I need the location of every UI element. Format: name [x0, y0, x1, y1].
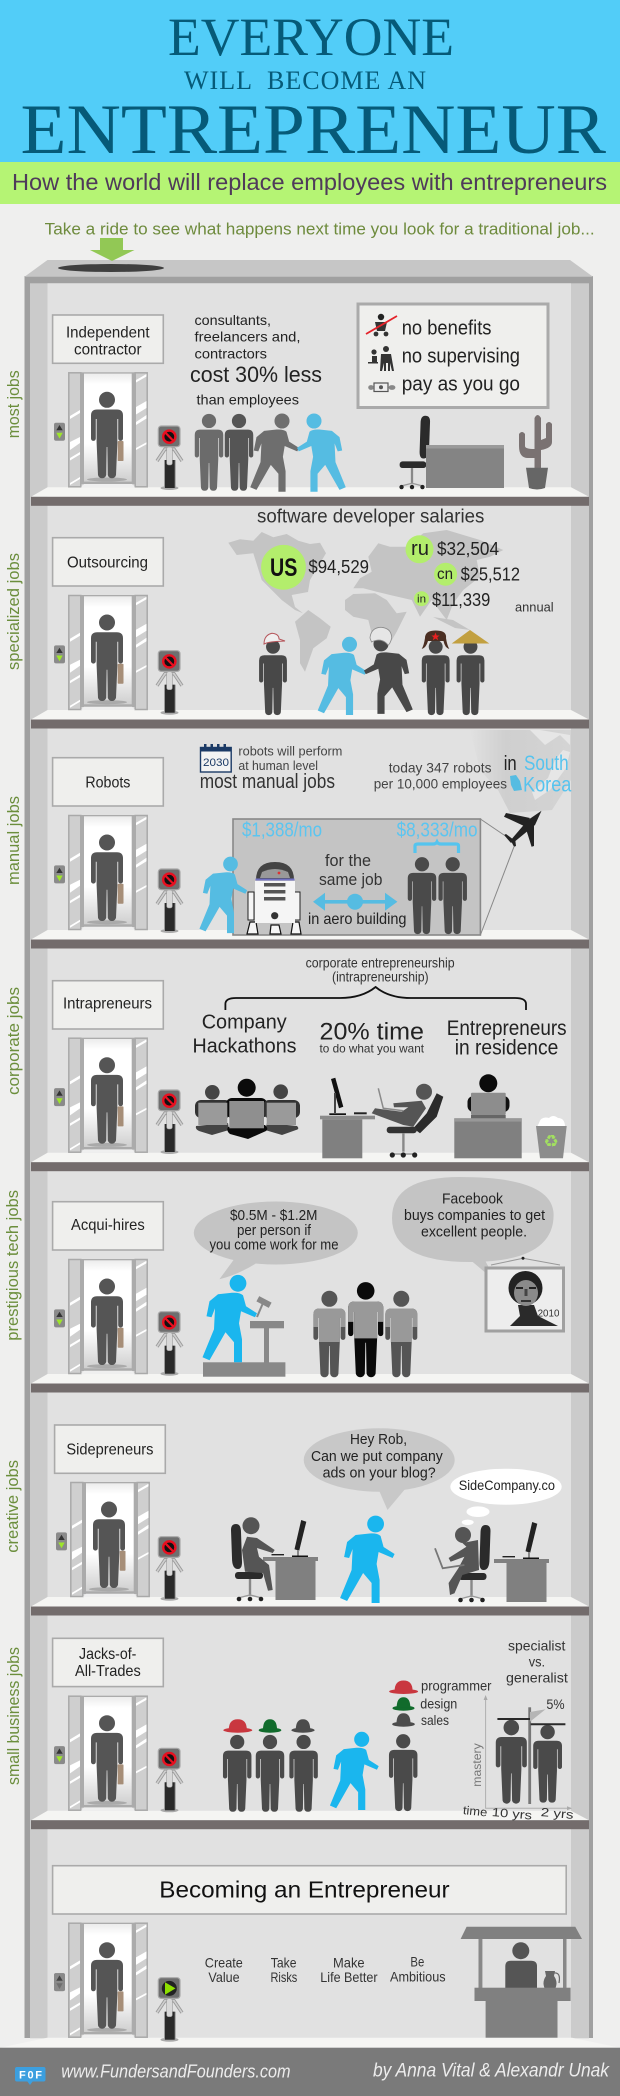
salary: US: US	[270, 554, 297, 582]
sign: independent contractor: contractor	[74, 342, 142, 359]
cactus	[519, 415, 552, 490]
double arrow	[313, 893, 397, 911]
human price: $8,333/mo	[397, 820, 478, 842]
elevator	[54, 1259, 147, 1374]
header background	[0, 0, 620, 162]
relaxing worker at desk	[320, 1078, 443, 1158]
subtitle: How the world will replace employees with entrepreneurs	[12, 169, 607, 195]
heading sign	[53, 1866, 566, 1914]
footer url: www.FundersandFounders.com	[61, 2061, 291, 2081]
kiosk: no entry	[157, 1090, 182, 1154]
blue generalist	[330, 1732, 379, 1810]
employees and contractor	[195, 413, 346, 492]
salaries heading: software developer salaries	[257, 507, 484, 528]
man with ushanka	[422, 630, 450, 715]
brace	[415, 842, 458, 853]
sign: acqui-hires	[53, 1202, 163, 1250]
hackathon group	[195, 1079, 300, 1139]
acquired team	[313, 1282, 417, 1377]
floor slabs	[31, 487, 589, 1829]
be ambitious: Be	[410, 1954, 424, 1970]
sign: outsourcing: Outsourcing	[67, 555, 148, 572]
create value: Create	[205, 1954, 243, 1970]
man with conical hat	[452, 630, 489, 715]
same job text: same job	[319, 870, 382, 889]
kiosk: no entry	[157, 869, 182, 933]
salary: China: cn	[437, 566, 453, 583]
sign: robots: Robots	[85, 775, 130, 792]
sign: intrapreneurs: Intrapreneurs	[63, 995, 152, 1012]
three specialists with hats	[223, 1719, 318, 1812]
hat legend	[389, 1678, 492, 1728]
panel: becoming an entrepreneur floor	[53, 1866, 582, 2042]
footer logo	[15, 2067, 46, 2085]
footer bar	[0, 2048, 620, 2096]
elevator	[54, 595, 147, 710]
panel: jacks-of-all-trades floor	[53, 1638, 574, 1823]
side labels: corporate jobs	[4, 987, 23, 1095]
sign: intrapreneurs	[53, 981, 163, 1029]
kiosk: no entry	[157, 1748, 182, 1812]
heading sign: Becoming an Entrepreneur	[159, 1877, 450, 1903]
entrepreneur in residence	[454, 1074, 522, 1158]
blue ad seeker	[340, 1516, 395, 1603]
desk and chair	[399, 416, 504, 489]
intro line: Take a ride to see what happens next time you look for a traditional job...	[45, 220, 595, 239]
man with legend	[389, 1734, 417, 1811]
robot price: $1,388/mo	[242, 820, 322, 842]
South Korea robots text: today 347 robots	[389, 760, 492, 776]
cost text: consultants,	[194, 312, 271, 328]
sign: sidepreneurs: Sidepreneurs	[66, 1441, 153, 1458]
sign: independent contractor	[53, 315, 163, 363]
mastery chart: 10 yrs	[491, 1805, 533, 1823]
speech bubble: Facebook: buys companies to get	[404, 1207, 546, 1224]
make life better: Life Better	[320, 1969, 378, 1985]
mastery chart: 5%	[546, 1696, 565, 1712]
panel: independent contractor floor	[53, 304, 552, 492]
side labels: small business jobs	[4, 1647, 23, 1785]
sign: robots	[53, 758, 163, 806]
recycle bin: ♻	[544, 1132, 559, 1151]
make life better	[320, 1954, 378, 1985]
panel: sidepreneurs floor	[55, 1425, 562, 1603]
man with cap	[259, 633, 287, 715]
speech bubble: Facebook	[392, 1177, 554, 1290]
side labels: prestigious tech jobs	[3, 1190, 22, 1341]
portrait	[508, 1271, 558, 1326]
South Korea robots text: South	[524, 752, 569, 775]
sign: sidepreneurs	[55, 1425, 165, 1473]
speech bubble: price: you come work for me	[210, 1236, 338, 1253]
panel: drawbacks: no benefits	[402, 317, 492, 339]
20 percent time	[320, 1018, 425, 1055]
side labels: creative jobs	[3, 1460, 22, 1553]
side labels: specialized jobs	[4, 553, 23, 670]
picture frame: 2010	[538, 1309, 560, 1320]
hat legend: design	[420, 1695, 457, 1711]
same job text: in aero building	[308, 911, 406, 928]
same job text: for the	[325, 851, 371, 870]
hat legend: sales	[421, 1712, 449, 1728]
map: Korea and Japan	[470, 730, 571, 813]
cost text: than employees	[196, 392, 299, 408]
panel: drawbacks	[358, 304, 548, 408]
panel: robots floor	[53, 730, 572, 935]
kiosk: no entry	[157, 651, 182, 715]
kiosk: no entry	[157, 426, 182, 490]
20 percent time: to do what you want	[320, 1041, 425, 1055]
take risks	[270, 1954, 297, 1985]
South Korea robots text: in	[504, 753, 517, 775]
same job text	[308, 851, 406, 928]
gavel	[256, 1296, 272, 1317]
panel: intrapreneurs floor	[53, 954, 567, 1158]
ground floor	[0, 2038, 620, 2048]
hat legend: programmer	[421, 1678, 492, 1694]
take risks: Risks	[270, 1969, 297, 1985]
entrepreneurs in residence	[447, 1017, 567, 1059]
elevator	[54, 1038, 147, 1153]
salary: Russia: ru	[411, 538, 429, 560]
speech bubble: ads: Hey Rob,	[350, 1431, 407, 1448]
make life better: Make	[333, 1954, 365, 1970]
salary: India: $11,339	[432, 590, 490, 610]
thought bubble	[450, 1469, 562, 1525]
specialist vs generalist heading: generalist	[506, 1670, 568, 1686]
salary: Russia	[406, 535, 499, 563]
zoom callout	[233, 819, 514, 935]
blue bidder	[202, 1275, 257, 1362]
title	[20, 7, 607, 169]
thought bubble: SideCompany.co	[459, 1477, 555, 1493]
cost text: contractors	[194, 345, 267, 361]
podium and platform	[203, 1321, 285, 1377]
mastery chart: time	[462, 1803, 488, 1820]
sign: jacks of all trades: Jacks-of-	[79, 1646, 136, 1663]
kiosk: no entry	[157, 1537, 182, 1601]
sign: independent contractor: Independent	[66, 324, 150, 341]
picture frame	[486, 1257, 564, 1331]
sign: outsourcing	[53, 538, 163, 586]
icon: calendar 2030	[200, 744, 231, 772]
salary: Russia: $32,504	[437, 539, 499, 559]
kiosk: no entry	[157, 1312, 182, 1376]
speech bubble: Facebook: excellent people.	[421, 1224, 527, 1241]
corporate heading	[306, 954, 455, 985]
side labels: manual jobs	[4, 796, 23, 885]
building shell	[24, 260, 593, 2038]
speech bubble: price: $0.5M - $1.2M	[230, 1207, 318, 1224]
subtitle band	[0, 162, 620, 204]
panel: outsourcing floor	[53, 507, 554, 715]
side labels	[3, 370, 23, 1785]
recycle bin	[536, 1116, 567, 1158]
speech bubble: Facebook: Facebook	[442, 1190, 503, 1207]
company hackathons: Company	[202, 1011, 287, 1033]
20 percent time: 20% time	[320, 1018, 424, 1045]
blogger at laptop	[435, 1522, 549, 1602]
company hackathons	[192, 1011, 296, 1057]
handshake	[318, 627, 413, 715]
salary: US: $94,529	[308, 557, 369, 577]
icon: calendar 2030: 2030	[203, 757, 229, 769]
corporate heading: corporate entrepreneurship	[306, 954, 455, 970]
title: EVERYONE	[168, 7, 454, 67]
cost text	[190, 312, 322, 408]
market stall	[461, 1927, 582, 2038]
be ambitious: Ambitious	[390, 1968, 446, 1984]
sign: jacks of all trades: All-Trades	[75, 1663, 141, 1680]
company hackathons: Hackathons	[192, 1035, 296, 1057]
panel: drawbacks: no supervising	[402, 346, 520, 368]
South Korea robots text: Korea	[523, 774, 572, 797]
salary: China: $25,512	[461, 565, 520, 585]
robot	[247, 862, 301, 934]
elevator	[54, 1923, 147, 2038]
mastery chart: mastery	[470, 1743, 484, 1787]
specialist vs generalist heading: specialist	[508, 1638, 565, 1654]
green arrow	[90, 238, 134, 261]
two workers	[408, 857, 467, 934]
robots prediction text: most manual jobs	[200, 771, 335, 793]
icon: cash	[368, 383, 395, 392]
sign: acqui-hires: Acqui-hires	[71, 1217, 145, 1234]
turban	[370, 627, 392, 645]
curly brace	[225, 987, 526, 1010]
be ambitious	[390, 1954, 446, 1984]
footer logo: F0F	[19, 2070, 42, 2082]
salary: US	[261, 545, 369, 590]
kiosk: go	[157, 1978, 182, 2042]
side labels: most jobs	[4, 370, 23, 438]
title: WILL BECOME AN	[184, 66, 426, 95]
panel: acqui-hires floor	[53, 1177, 563, 1377]
panel: drawbacks: pay as you go	[402, 374, 520, 396]
take risks: Take	[271, 1954, 297, 1970]
create value	[205, 1954, 243, 1985]
elevator	[56, 1482, 149, 1597]
employee at desk	[231, 1517, 318, 1601]
South Korea robots text	[374, 752, 572, 797]
robots prediction text: robots will perform	[238, 743, 342, 758]
corporate heading: (intrapreneurship)	[332, 969, 429, 985]
entrepreneurs in residence: in residence	[455, 1036, 558, 1059]
create value: Value	[208, 1969, 240, 1985]
South Korea robots text: per 10,000 employees	[374, 775, 507, 791]
title: ENTREPRENEUR	[20, 91, 607, 169]
specialist vs generalist heading: vs.	[529, 1654, 545, 1670]
robots prediction text: at human level	[238, 758, 318, 773]
blue walker	[199, 857, 247, 933]
elevator	[54, 372, 147, 487]
world map	[228, 530, 503, 672]
icon: supervisor	[368, 346, 394, 371]
robots prediction text	[200, 743, 342, 793]
elevator	[54, 1696, 147, 1811]
mastery chart	[462, 1695, 574, 1823]
elevator	[54, 815, 147, 930]
sign: jacks of all trades	[53, 1638, 163, 1687]
speech bubble: ads: ads on your blog?	[323, 1464, 436, 1481]
speech bubble: price: per person if	[237, 1222, 312, 1239]
salary: China	[434, 563, 520, 586]
annual note: annual	[515, 600, 554, 615]
speech bubble: ads	[304, 1428, 455, 1510]
salary: India: in	[417, 594, 426, 606]
mastery chart: 2 yrs	[540, 1805, 574, 1822]
entrepreneurs in residence: Entrepreneurs	[447, 1017, 567, 1040]
icon: baby crossed out	[366, 314, 397, 336]
specialist vs generalist heading	[506, 1638, 568, 1686]
cost text: cost 30% less	[190, 362, 322, 387]
speech bubble: price	[194, 1202, 358, 1279]
cost text: freelancers and,	[194, 329, 300, 345]
roof hole	[58, 264, 164, 272]
speech bubble: ads: Can we put company	[311, 1448, 443, 1465]
icon: plane	[504, 811, 542, 847]
